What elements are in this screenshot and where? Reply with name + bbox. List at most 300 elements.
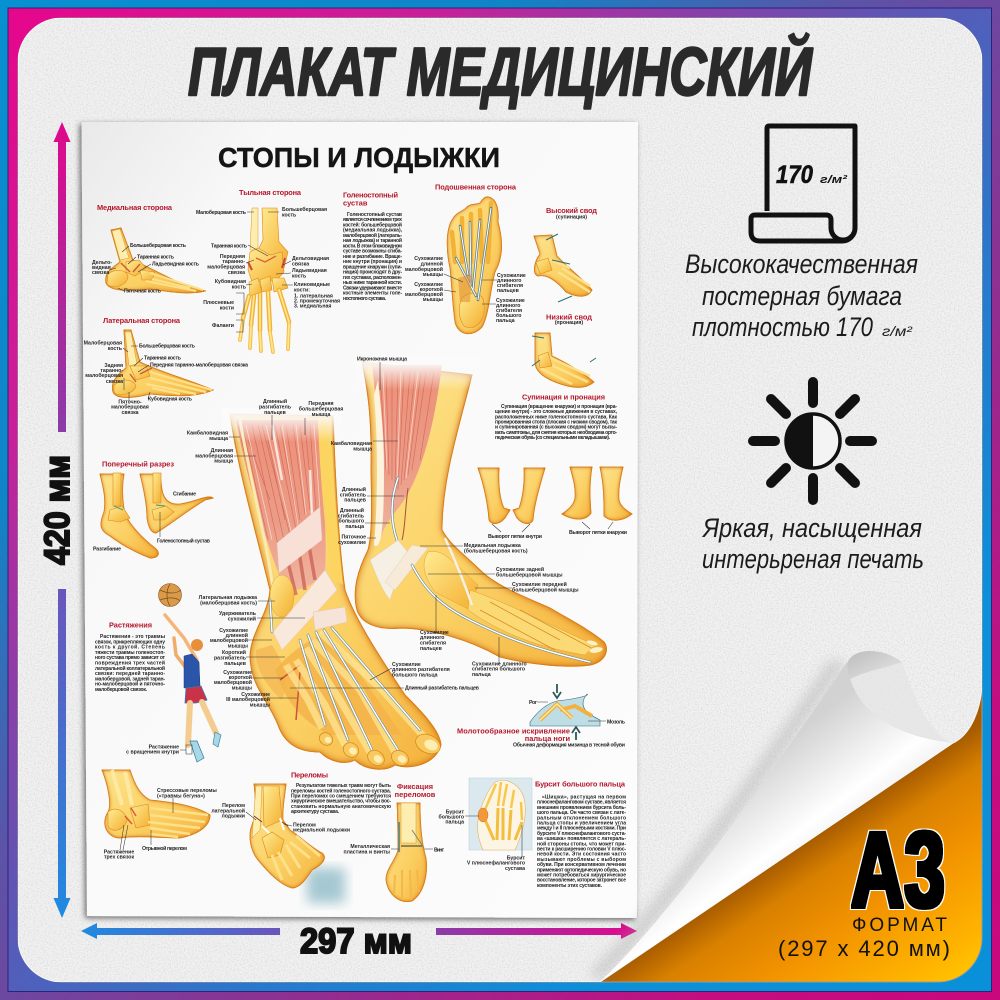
text block: fractures: архитектуру сустава.	[291, 809, 340, 815]
heading: fracture fixation: Фиксация	[397, 782, 433, 791]
labels: dorsal side: Клиновидные	[294, 282, 330, 288]
text block: ankle joint: кости. В этом блоковидном	[343, 242, 402, 250]
labels: anterior foot: длинного разгибателя	[392, 666, 450, 673]
labels: heel positions: Выворот пятки кнутри	[488, 534, 542, 540]
labels: medial side: Ладьевидная кость	[152, 262, 199, 268]
labels: medial side: видная	[92, 265, 111, 271]
labels: lateral side: Большеберцовая кость	[139, 342, 195, 350]
text block: sprains: связок, прикрепляющих одну	[95, 639, 165, 645]
text block: sprains: повреждения трех частей	[95, 660, 165, 666]
labels: dorsal side: Большеберцовая	[282, 207, 327, 213]
heading: plantar side: Подошвенная сторона	[435, 182, 517, 192]
labels: medial foot	[331, 356, 579, 678]
heading: high arch: Высокий свод	[546, 206, 597, 215]
labels: medial foot: (большеберцовая кость)	[464, 548, 528, 554]
labels: bunion illustration: пальца	[445, 820, 464, 826]
text block: paper description: Высококачественная	[685, 249, 918, 279]
labels: medial foot: большеберцовой мышцы	[512, 586, 579, 594]
labels: dorsal side: Ладьевидная	[292, 268, 327, 274]
labels: plantar side: Сухожилие	[414, 256, 443, 262]
labels: fixation foot: Винт	[434, 848, 444, 854]
label: rotation sprain	[126, 744, 192, 756]
panel: hammer toe	[457, 684, 625, 748]
labels: medial foot: пальца	[345, 524, 364, 530]
heading: hammer toe: Молотообразное искривление	[457, 726, 570, 736]
labels: anterior foot: длинной	[226, 632, 248, 639]
labels: dorsal side: кость	[232, 284, 246, 290]
labels: medial foot: Медиальная лодыжка	[464, 543, 521, 549]
text block: supination and pronation: и супинированная (с высоким сводом) могут вызы-	[495, 425, 617, 431]
text block: ankle joint: вращение кнаружи (супи-	[343, 264, 402, 270]
text block: sprains: тяжести травмы голеностоп-	[95, 650, 165, 656]
labels: plantar side: короткой	[420, 286, 443, 293]
text block: bunion: плюснефаланговом суставе, является	[537, 799, 626, 806]
arrow: height lower	[54, 589, 70, 918]
labels: heel positions	[488, 522, 627, 540]
labels: medial foot: длинного	[420, 635, 444, 641]
labels: cross section: Голеностопный сустав	[157, 538, 210, 544]
illustration: medial foot and leg muscles	[355, 356, 606, 666]
panel: dorsal side	[196, 188, 340, 352]
icon: sun half circle	[753, 382, 872, 500]
labels: medial foot: пальца	[472, 672, 491, 678]
text block: supination and pronation: расположенных ниже голеностопного сустава. Как	[495, 414, 617, 420]
labels: anterior foot: сухожилий	[228, 616, 256, 622]
text block: paper description: г/м²	[882, 323, 914, 339]
labels: lateral side: Передняя таранно-малоберцовая связка	[150, 362, 248, 368]
text block: bunion: ва «шишка» появляется с латераль-	[537, 836, 626, 842]
labels: anterior foot: короткой	[229, 674, 252, 681]
text block: fractures: переломы костей голеностопного сустава.	[291, 787, 392, 794]
panel: low arch	[532, 312, 596, 387]
heading: hammer toe	[457, 726, 570, 743]
panel: supination and pronation	[495, 392, 618, 441]
labels: dorsal side: таранно-	[222, 259, 245, 265]
labels: bunion illustration	[439, 810, 525, 872]
labels: hammer toe: Рог	[529, 700, 538, 706]
heading: lateral side: Латеральная сторона	[103, 316, 181, 325]
panel: ankle joint text	[343, 190, 403, 302]
panel: fracture fixation	[343, 782, 444, 902]
curl shadow	[590, 660, 847, 982]
text block: sprains: но-малоберцовой и пяточно-	[95, 681, 165, 688]
labels: medial foot: большого	[339, 518, 364, 524]
labels: anterior foot: мышцы	[250, 702, 271, 708]
format label	[778, 809, 950, 961]
labels: anterior foot: Удерживатель	[219, 611, 256, 617]
labels: medial side: связка	[92, 270, 109, 276]
illustration: dorsal skeleton	[240, 208, 289, 352]
text block: bunion	[537, 794, 626, 889]
labels: medial foot: сгибатель	[340, 492, 366, 498]
caption: hammer toe: Обычная деформация мизинца в тесной обуви	[513, 742, 625, 748]
labels: hammer toe	[529, 700, 625, 726]
labels: cross section: Разгибание	[93, 546, 121, 552]
heading: fracture fixation: переломов	[395, 790, 436, 799]
heading: medial side: Медиальная сторона	[97, 203, 173, 212]
illustration: fixation foot	[386, 803, 426, 902]
text block: bunion: пальца стопы и увеличением угла	[537, 820, 626, 826]
labels: medial foot: Камбаловидная	[331, 441, 372, 447]
text block: bunion: ной стороны стопы, что может при-	[537, 840, 626, 847]
labels: stress fracture foot: Растяжение	[104, 850, 134, 856]
text block: bunion: ральным отклонением большого	[537, 814, 626, 821]
illustration: fractured ankle	[250, 784, 345, 903]
curl flap	[600, 662, 953, 982]
text block: bunion: восстановление, которое затронет все	[537, 878, 626, 884]
labels: anterior foot: малоберцовой	[210, 637, 248, 644]
panel: plantar side	[405, 182, 526, 334]
heading: hammer toe: пальца ноги	[525, 734, 570, 743]
heading: dorsal side: Тыльная сторона	[239, 188, 302, 197]
labels: plantar side: большого	[496, 312, 521, 319]
text block: ankle joint: ние кнутри (пронация) и	[343, 259, 402, 265]
labels: medial side: Большеберцовая кость	[130, 242, 186, 249]
labels: plantar side: мышцы	[423, 297, 444, 303]
labels: medial foot: Пяточное	[342, 534, 366, 540]
labels: plantar side: малоберцовой	[405, 266, 443, 273]
labels: bunion illustration: большого	[439, 814, 464, 820]
text block: print description: интерьреная печать	[702, 544, 924, 574]
labels: anterior foot: Короткий	[222, 650, 246, 656]
labels: fixation foot: Металлическая	[350, 844, 390, 850]
labels: lateral side: кость	[108, 346, 122, 352]
labels: cross section	[93, 490, 210, 552]
labels: dorsal side: Передняя	[220, 254, 245, 260]
text block: sprains: кость к другой. Степень	[95, 644, 165, 651]
labels: plantar side: мышцы	[423, 272, 444, 278]
illustration: heels inverted	[478, 468, 545, 524]
text block: ankle joint: нация) происходят в дру-	[343, 270, 402, 276]
panel: fractures lateral	[102, 770, 217, 860]
labels: dorsal side: связка	[228, 270, 245, 276]
text block: bunion: вести к расширению головки V плюс-	[537, 846, 626, 852]
text block: fractures: становить нормальную анатомическую	[291, 804, 392, 810]
labels: plantar side	[405, 256, 526, 324]
labels: anterior foot: Сухожилие	[392, 662, 421, 668]
text block: bunion: внешним проявлением бурсита боль-	[537, 804, 626, 811]
illustration: low arch foot	[532, 333, 596, 387]
labels: fractured ankle: латеральной	[211, 808, 245, 814]
text block: bunion: может потребоваться хирургическое	[537, 872, 626, 878]
text block: print description	[701, 513, 924, 574]
format: word: ФОРМАТ	[852, 915, 947, 936]
labels: fractured ankle: Перелом	[222, 803, 245, 809]
text block: ankle joint: ная лодыжка) и таранной	[343, 237, 402, 244]
text block: sprains: латеральной коллатеральной	[95, 665, 165, 672]
labels: bunion illustration: V плюснефалангового	[467, 860, 525, 866]
panel: bunion	[439, 778, 626, 889]
text block: paper description: плотностью 170	[692, 312, 873, 342]
labels: fractured ankle: лодыжки	[221, 814, 245, 820]
labels: plantar side: длинного	[497, 278, 521, 284]
text block: ankle joint: гих суставах, расположен-	[343, 275, 402, 281]
labels: anterior foot: Сухожилие	[219, 628, 248, 634]
illustration: anterior foot and leg muscles	[222, 408, 444, 769]
heading: ankle joint: Голеностопный	[343, 190, 398, 200]
text block: sprains: малоберцовой связок.	[95, 686, 148, 693]
label: rotation sprain: с вращением кнутри	[126, 750, 179, 756]
labels: medial foot: большеберцовой мышцы	[496, 572, 563, 578]
labels: anterior foot: мышцы	[232, 686, 253, 692]
illustration: high arch foot	[534, 234, 592, 302]
panel: main anterior foot	[187, 398, 479, 769]
labels: medial foot: Сухожилие	[420, 630, 449, 636]
labels: dorsal side: Таранная кость	[211, 244, 247, 250]
labels: fractured ankle	[211, 803, 350, 834]
labels: bunion illustration: Бурсит	[507, 856, 525, 862]
panel: sprains	[95, 584, 221, 762]
labels: anterior foot: Камбаловидная	[187, 430, 228, 436]
labels: anterior foot: пальцев	[224, 661, 246, 667]
labels: medial foot: Сухожилие длинного	[472, 662, 527, 668]
format: A3: А3	[851, 809, 945, 930]
labels: stress fracture foot: Отрывной перелом	[142, 845, 187, 852]
panel: fractures	[211, 770, 392, 903]
poster title: СТОПЫ И ЛОДЫЖКИ	[218, 142, 500, 173]
labels: stress fracture foot	[104, 788, 217, 860]
labels: medial foot: Сухожилие задней	[496, 567, 544, 573]
text block: ankle joint: Связки удерживают вместе	[343, 286, 402, 292]
labels: anterior foot: Передняя	[308, 401, 334, 407]
text block: sprains: ного сустава прямо зависит от	[95, 655, 166, 661]
labels: medial side: Таранная кость	[137, 254, 174, 260]
panel: high arch	[534, 206, 597, 302]
labels: dorsal side: 3. медиальная	[294, 304, 331, 310]
labels: dorsal side: кости:	[294, 288, 310, 294]
labels: lateral side: Пяточно-	[118, 400, 142, 406]
text block: bunion: обуви. При консервативном лечении	[537, 861, 626, 868]
heading: ankle joint	[343, 190, 398, 208]
labels: anterior foot: большого пальца	[392, 672, 438, 678]
labels: lateral side: связка	[106, 379, 123, 385]
labels: dorsal side: Малоберцовая кость	[196, 209, 246, 216]
labels: anterior foot: большеберцовая	[299, 406, 343, 412]
labels: dorsal side: Дельтовидная	[292, 256, 329, 262]
labels: anterior foot: Сухожилие	[223, 670, 252, 676]
labels: plantar side: сгибателя	[497, 282, 523, 289]
labels: dorsal side: Кубовидная	[215, 279, 246, 285]
labels: anterior foot: мышцы	[228, 644, 249, 650]
heading: bunion: Бурсит большого пальца	[535, 780, 626, 788]
text block: bunion: невой кости. Эти состояния часто	[537, 851, 626, 858]
heading: cross section: Поперечный разрез	[102, 460, 174, 468]
label: rotation sprain: Растяжение	[149, 744, 179, 750]
illustration: medial foot bones	[106, 228, 205, 293]
illustration: bunion foot in box	[469, 778, 532, 850]
panel: cross section	[93, 460, 213, 558]
labels: lateral side: малоберцовая	[85, 372, 123, 379]
text block: bunion: шого пальца. Он часто связан с лате-	[537, 810, 626, 816]
labels: dorsal side: Фаланги	[212, 323, 234, 329]
labels: medial foot: пальцев	[420, 646, 442, 652]
labels: lateral side: связка	[121, 410, 139, 416]
labels: cross section: Сгибание	[173, 490, 196, 498]
labels: medial foot: Икроножная мышца	[357, 356, 407, 362]
labels: medial side: Дельто-	[92, 260, 112, 266]
heading: low arch: Низкий свод	[546, 312, 592, 322]
text block: sprains: связки: передней таранно-	[95, 670, 165, 677]
labels: plantar side: пальца	[496, 318, 515, 324]
labels: anterior foot: мышца	[209, 436, 228, 442]
labels: dorsal side: 2. промежуточная	[294, 298, 340, 304]
format: dimensions: (297 х 420 мм)	[778, 936, 950, 961]
text block: ankle joint: костные элементы голе-	[343, 291, 402, 297]
text block: supination and pronation: вать симптомы, для снятия которых необходима орто-	[495, 429, 617, 436]
labels: dorsal side	[196, 206, 340, 332]
labels: anterior foot: мышца	[312, 412, 330, 418]
heading: sprains: Растяжения	[109, 620, 152, 630]
labels: dorsal side: кости	[220, 306, 234, 312]
illustration: hammer toe	[530, 684, 600, 740]
labels: lateral side: Кубовидная кость	[148, 396, 192, 402]
labels: plantar side: Сухожилие	[497, 273, 526, 279]
arrow: width left	[81, 923, 280, 939]
heading: ankle joint: сустав	[343, 198, 368, 208]
labels: bunion illustration: сустава	[505, 866, 525, 872]
labels: anterior foot: III малоберцовой	[226, 696, 270, 703]
text block: sprains: Растяжения - это травмы	[100, 634, 165, 640]
labels: anterior foot: малоберцовой	[214, 679, 252, 686]
labels: lateral side: малоберцовая	[111, 404, 149, 410]
labels: anterior foot: мышца	[214, 458, 233, 464]
text block: bunion: «Шишка», растущая на первом	[542, 794, 626, 800]
text block: ankle joint: малоберцовой (латераль-	[343, 232, 402, 239]
labels: plantar side: Сухожилие	[414, 282, 443, 288]
main title: ПЛАКАТ МЕДИЦИНСКИЙ	[188, 32, 814, 110]
text block: fractures: При переломах со смещением требуются	[291, 792, 391, 800]
labels: anterior foot: малоберцовая	[195, 452, 233, 460]
illustration: lateral foot bones	[112, 330, 213, 398]
labels: medial foot: сухожилие	[338, 540, 366, 546]
text block: supination and pronation	[495, 404, 618, 441]
curl paper shade	[847, 654, 953, 743]
text block: ankle joint: суставе возможны сгиба-	[343, 248, 402, 255]
text block: ankle joint: (медиальная лодыжка),	[343, 228, 403, 234]
text block: bunion: применяют ортопедическую обувь, но	[537, 866, 626, 873]
labels: medial foot: Сухожилие передней	[512, 582, 567, 588]
labels: dorsal side: Плюсневые	[203, 300, 234, 306]
labels: medial foot: Длинный	[340, 508, 364, 514]
text block: sprains	[95, 634, 166, 693]
illustration: flexed foot section	[140, 473, 213, 533]
text block: fractures: Результатом тяжелых травм могут быть	[296, 782, 391, 789]
dimension label: width: 297 мм	[300, 922, 412, 961]
labels: anterior foot: разгибатель	[259, 404, 291, 410]
labels: dorsal side: 1. латеральная	[294, 294, 333, 300]
caption: pronation: (пронация)	[555, 320, 583, 326]
heading: supination and pronation: Супинация и пронация	[522, 392, 605, 402]
arrow: width right	[436, 923, 637, 939]
labels: plantar side: длинной	[421, 260, 443, 268]
illustration: heels everted	[562, 467, 632, 520]
text block: ankle joint: костей: большеберцовой	[343, 222, 402, 228]
labels: anterior foot: Длинный разгибатель пальцев	[405, 684, 479, 692]
text block: bunion: бурсите V плюснефалангового суста-	[537, 830, 626, 837]
labels: plantar side: сгибателя	[496, 307, 522, 314]
labels: medial side: Пяточная кость	[124, 288, 161, 294]
labels: hammer toe: Мозоль	[607, 720, 625, 726]
text block: ankle joint: Голеностопный сустав	[347, 211, 402, 218]
labels: anterior foot: (малоберцовая кость)	[200, 600, 257, 606]
labels: heel positions: Выворот пятки кнаружи	[569, 530, 627, 536]
text block: ankle joint: ние и разгибание. Враще-	[343, 253, 402, 260]
illustration: stress fracture foot	[102, 770, 210, 838]
labels: plantar side: Сухожилие	[496, 298, 525, 304]
labels: anterior foot: Длинная	[211, 448, 233, 454]
illustration: plantar foot	[447, 197, 501, 334]
text block: ankle joint	[343, 211, 403, 302]
labels: medial foot: Длинный	[342, 487, 366, 493]
text block: ankle joint: является сочленением трех	[343, 217, 402, 223]
labels: stress fracture foot: Стрессовые переломы	[157, 788, 217, 794]
panel: medial side	[92, 203, 205, 294]
text block: bunion: между I и II плюсневыми костями. При	[537, 826, 626, 832]
text block: supination and pronation: пронированная стопа (плоская с низким сводом), так	[495, 420, 617, 426]
text block: sprains: малоберцовой, задней таран-	[95, 675, 165, 682]
text block: print description: Яркая, насыщенная	[701, 513, 922, 543]
illustration: extended foot section	[100, 473, 158, 558]
labels: anterior foot: Латеральная лодыжка	[199, 595, 257, 601]
labels: anterior foot	[187, 398, 479, 708]
dimension label: height: 420 мм	[38, 455, 77, 565]
text block: fractures	[291, 782, 392, 815]
panel: main medial foot	[331, 356, 606, 678]
labels: fractured ankle: Перелом	[293, 822, 316, 828]
caption: supination: (супинация)	[556, 214, 587, 220]
panel: heel inversion and eversion	[478, 467, 632, 540]
labels: anterior foot: пальцев	[264, 410, 286, 416]
text block: paper description: постерная бумага	[702, 281, 902, 311]
text block: supination and pronation: Супинация (вращение кнаружи) и пронация (вра-	[501, 404, 617, 410]
labels: plantar side: пальцев	[497, 288, 519, 294]
arrow: height upper	[54, 122, 70, 432]
text block: paper description	[685, 249, 918, 342]
icon: paper roll 170 g/m2	[751, 126, 855, 241]
labels: lateral side: Малоберцовая	[84, 340, 122, 346]
text block: bunion: компоненты этих суставов.	[537, 883, 603, 889]
labels: medial foot: мышца	[353, 446, 372, 452]
labels: anterior foot: Сухожилие	[241, 692, 270, 698]
labels: medial side	[92, 242, 199, 294]
text block: bunion: вызывают проблемы с выбором	[537, 856, 626, 863]
text block: supination and pronation: щение кнутри) - это сложные движения в суставах,	[495, 409, 618, 415]
labels: lateral side: Таранная кость	[144, 356, 181, 362]
labels: lateral side: Задняя	[104, 363, 123, 369]
labels: plantar side: малоберцовой	[405, 291, 443, 298]
icon text: density: 170	[776, 161, 813, 189]
labels: stress fracture foot: трех связок	[104, 854, 134, 860]
labels: fractured ankle: медиальной лодыжки	[293, 826, 350, 834]
text block: ankle joint: ностопного сустава.	[343, 296, 387, 302]
icon text: unit: г/м²	[820, 174, 847, 186]
labels: plantar side: длинного	[496, 303, 520, 309]
text block: supination and pronation: педическая обувь (со специальными вкладышами).	[495, 434, 611, 441]
labels: medial foot: сгибателя	[420, 640, 446, 646]
labels: medial foot: сгибатель	[338, 512, 364, 520]
text block: fractures: хирургическое вмешательство, чтобы вос-	[291, 798, 391, 805]
illustration: basketball player	[165, 615, 221, 762]
text block: ankle joint: ных ниже таранной кости.	[343, 279, 403, 286]
poster sheet	[82, 122, 638, 918]
panel: lateral side	[84, 316, 248, 416]
labels: fixation foot: пластина и винты	[343, 850, 391, 856]
labels: lateral side: таранно-	[100, 368, 123, 374]
labels: dorsal side: связка	[292, 262, 309, 268]
labels: stress fracture foot: («травмы бегуна»)	[157, 792, 205, 800]
labels: dorsal side: кость	[292, 274, 306, 280]
labels: fixation foot	[343, 844, 444, 856]
